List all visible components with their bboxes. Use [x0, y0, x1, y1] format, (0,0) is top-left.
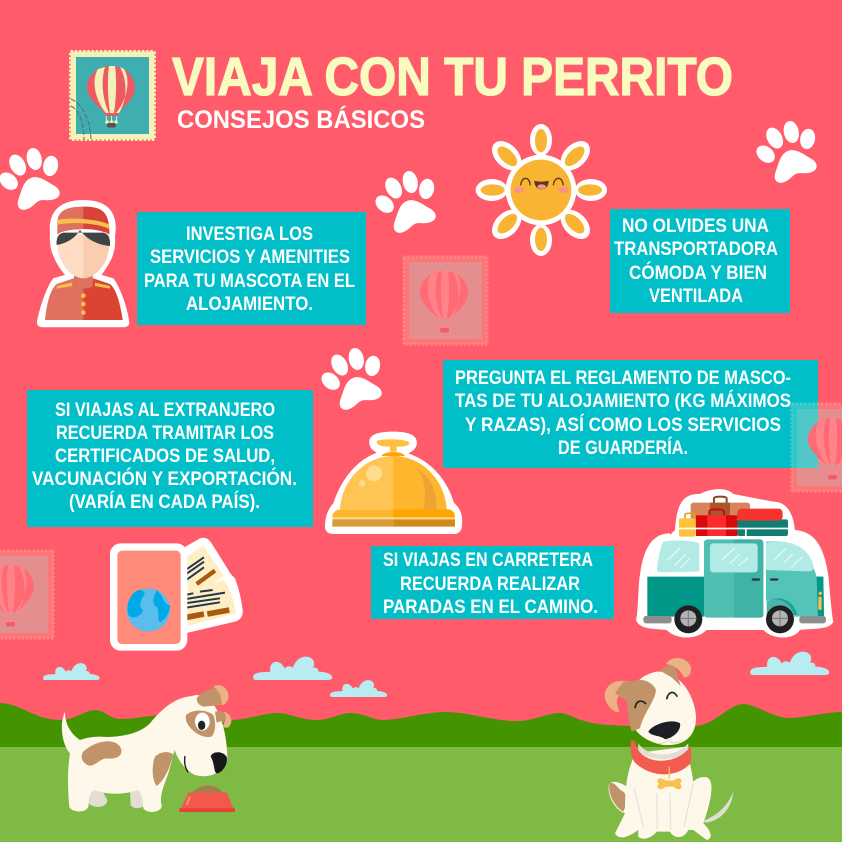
panel: viajes al extranjero: CERTIFICADOS DE SALUD,: [55, 446, 275, 467]
panel: servicios y amenities: PARA TU MASCOTA EN EL: [144, 271, 355, 292]
collar: [631, 741, 691, 774]
icon: service bell: [325, 432, 462, 534]
panel: transportadora: [610, 209, 790, 313]
panel: viajes al extranjero: RECUERDA TRAMITAR LOS: [56, 423, 274, 444]
back legs shadow: [87, 787, 144, 808]
clouds: [43, 652, 829, 697]
panel: viajes en carretera: RECUERDA REALIZAR: [400, 574, 580, 595]
ears: [197, 689, 222, 707]
ears: [605, 681, 632, 712]
panel: viajes al extranjero: SI VIAJAS AL EXTRANJERO: [55, 400, 275, 421]
head: [628, 672, 696, 745]
icon: smiling sun: [476, 124, 607, 256]
face: [635, 692, 677, 708]
panel: viajes al extranjero: [27, 390, 313, 527]
panel: reglamento de mascotas: PREGUNTA EL REGLAMENTO DE MASCO-: [455, 368, 791, 389]
bowl: [193, 786, 223, 793]
nose: [211, 752, 227, 773]
bone tag: [667, 767, 671, 778]
panel: viajes en carretera: [371, 546, 614, 619]
panel: transportadora: CÓMODA Y BIEN: [629, 262, 767, 284]
panel: servicios y amenities: INVESTIGA LOS: [186, 224, 313, 245]
icon: passport and tickets: [110, 538, 243, 651]
panel: viajes al extranjero: (VARÍA EN CADA PAÍS).: [69, 491, 260, 513]
panel: servicios y amenities: ALOJAMIENTO.: [186, 294, 313, 315]
head: [171, 695, 227, 776]
panel: reglamento de mascotas: DE GUARDERÍA.: [558, 437, 688, 459]
body: [62, 696, 200, 812]
paw prints: [0, 112, 830, 416]
panel: transportadora: VENTILADA: [649, 286, 743, 307]
dark green hills: [0, 703, 842, 748]
panel: reglamento de mascotas: Y RAZAS), ASÍ COMO LOS SERVICIOS: [465, 414, 781, 436]
illustration: happy puppy with collar: [605, 658, 733, 840]
panel: viajes en carretera: PARADAS EN EL CAMINO.: [383, 597, 598, 618]
stamp: hot air balloon: [70, 52, 154, 140]
panel: viajes al extranjero: VACUNACIÓN Y EXPORTACIÓN.: [32, 468, 297, 490]
tail: [702, 792, 733, 823]
body: [615, 747, 711, 840]
illustration: puppy eating: [62, 685, 235, 812]
panel: servicios y amenities: [137, 212, 366, 325]
panel: transportadora: TRANSPORTADORA: [614, 239, 778, 260]
icon: van with luggage: [636, 489, 833, 637]
subtitle: CONSEJOS BÁSICOS: [177, 105, 425, 134]
panel: servicios y amenities: SERVICIOS Y AMENITIES: [150, 247, 350, 268]
panel: reglamento de mascotas: [443, 360, 818, 468]
title: VIAJA CON TU PERRITO: [172, 47, 733, 107]
panel: transportadora: NO OLVIDES UNA: [622, 216, 769, 237]
panel: viajes en carretera: SI VIAJAS EN CARRETERA: [383, 550, 593, 571]
panel: reglamento de mascotas: TAS DE TU ALOJAMIENTO (KG MÁXIMOS: [455, 390, 791, 412]
light green grass: [0, 747, 842, 842]
haunch: [609, 782, 632, 813]
faded stamps: [0, 256, 842, 638]
icon: bellhop: [37, 200, 129, 327]
